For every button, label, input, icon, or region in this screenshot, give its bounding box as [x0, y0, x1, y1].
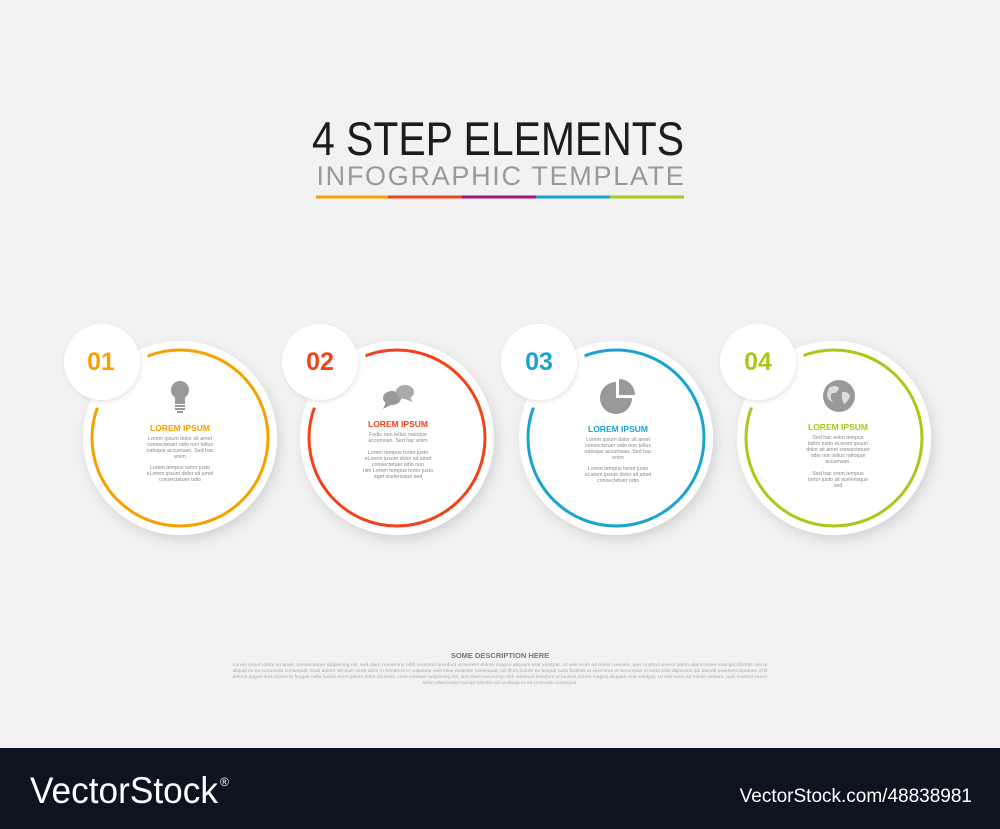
text block 3: consectetuer odio	[597, 478, 639, 484]
step 2	[274, 316, 494, 535]
text block 1: eLorem ipsum dolor sit amet	[147, 471, 214, 477]
text block 3: Lorem ipsum dolor sit amet	[586, 437, 650, 443]
icon: globe	[823, 380, 855, 412]
title: 4 STEP ELEMENTS	[312, 112, 684, 165]
title	[312, 112, 686, 191]
text block 3	[584, 424, 652, 484]
text block 3: Lorem tempus tortor justo	[588, 466, 648, 472]
text block 1: enim	[174, 454, 186, 460]
text block 2: Fodio non tellus natoque	[369, 432, 427, 438]
number 03: 03	[525, 348, 553, 376]
text block 1: LOREM IPSUM	[150, 423, 210, 433]
description text: aliquip ex ea commodo consequat. Duis autem vel eum iriure dolor in hendrerit in vulputate velit esse molestie consequat, vel illum dolore eu feugiat nulla facilisis at vero eros et accumsan et iusto odio dignissim qui blandit praesent luptatum zzril	[232, 668, 768, 673]
text block 2: eget scelerisque sed	[374, 474, 422, 480]
text block 1: natoque accumsan. Sed hac	[146, 448, 214, 454]
text block 2: eLorem ipsum dolor sit amet	[365, 456, 432, 462]
text block 1: consectetuer odio	[159, 477, 201, 483]
text block 4: LOREM IPSUM	[808, 422, 868, 432]
footer bar: ®	[220, 775, 229, 789]
description text: SOME DESCRIPTION HERE	[451, 651, 549, 660]
description text: delenit augue duis dolore te feugait nulla facilisi orem ipsum dolor sit amet, cons ectetuer adipiscing elit, sed diam nonummy nibh euismod tincidunt ut laoreet dolore magna aliquam erat volutpat. Ut wisi enim ad minim veniam, quis nostrud exerci	[232, 674, 768, 679]
text block 2: LOREM IPSUM	[368, 419, 428, 429]
text block 3: eLorem ipsum dolor sit amet	[585, 472, 652, 478]
text block 2: Lorem tempus tortor justo	[368, 450, 428, 456]
text block 1	[146, 423, 214, 483]
description text	[232, 651, 768, 685]
text block 1: consectetuer odio non tellus	[147, 442, 213, 448]
text block 2: accumsan. Sed hac enim	[368, 438, 428, 444]
text block 2: nim Lorem tempus tortor justo	[363, 468, 433, 474]
icon: light bulb	[171, 381, 189, 413]
number 04: 04	[744, 348, 772, 376]
text block 4: sed	[834, 483, 842, 489]
description text: tation ullamcorper suscipit lobortis nisl ut aliquip ex ea commodo consequat.	[423, 680, 577, 685]
text block 4: dolor sit amet consectetuer	[806, 447, 870, 453]
step 4	[712, 316, 931, 535]
text block 3: natoque accumsan. Sed hac	[584, 449, 652, 455]
step 1	[56, 316, 277, 535]
text block 4: tortor justo sit scelerisque	[808, 477, 868, 483]
text block 1: Lorem ipsum dolor sit amet	[148, 436, 212, 442]
text block 3: consectetuer odio non tellus	[585, 443, 651, 449]
text block 4: Sed hac enim tempus	[812, 435, 864, 441]
footer bar: VectorStock.com/48838981	[740, 786, 972, 807]
text block 4: accumsan.	[825, 459, 851, 465]
number 01: 01	[87, 348, 115, 376]
icon: speech bubbles	[383, 385, 414, 409]
text block 3: enim	[612, 455, 624, 461]
footer bar	[0, 748, 1000, 829]
text block 4: Sed hac enim tempus	[812, 471, 864, 477]
text block 4: odio non tellus natoque	[811, 453, 865, 459]
number 02: 02	[306, 348, 334, 376]
text block 4: tortor justo eLorem ipsum	[808, 441, 869, 447]
footer bar: VectorStock	[30, 770, 218, 811]
text block 1: Lorem tempus tortor justo	[150, 465, 210, 471]
text block 4	[806, 422, 870, 489]
text block 3: LOREM IPSUM	[588, 424, 648, 434]
color divider line	[316, 196, 684, 198]
title: INFOGRAPHIC TEMPLATE	[316, 161, 686, 191]
description text: Lorem ipsum dolor sit amet, consectetuer adipiscing elit, sed diam nonummy nibh euismod tincidunt ut laoreet dolore magna aliquam erat volutpat. Ut wisi enim ad minim veniam, quis nostrud exerci tation ullamcorper suscipit lobortis nisl ut	[232, 662, 768, 667]
text block 2: consectetuer odio non	[372, 462, 424, 468]
step 3	[493, 316, 713, 535]
icon: pie chart	[600, 379, 635, 414]
text block 2	[363, 419, 433, 480]
